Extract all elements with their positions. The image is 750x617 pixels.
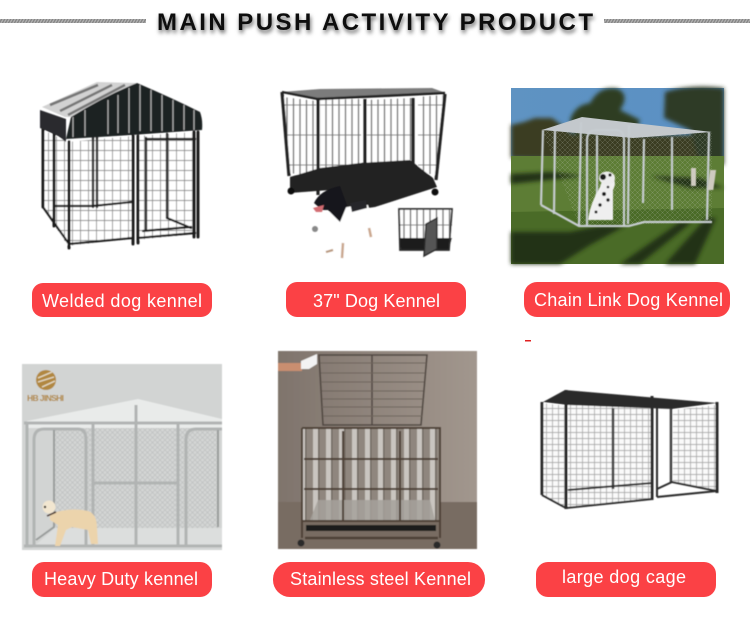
tree shadows bbox=[511, 172, 724, 264]
cage frame bbox=[542, 390, 717, 509]
welded kennel dark roof front bbox=[66, 83, 202, 139]
stainless tray bbox=[306, 525, 436, 531]
label: chain link dog kennel bbox=[524, 282, 730, 317]
label: stainless steel kennel bbox=[273, 562, 485, 597]
foreground grass bbox=[511, 208, 724, 264]
label: 37 inch dog kennel: 37" Dog Kennel bbox=[313, 291, 440, 311]
red speck bbox=[525, 340, 531, 342]
label: large dog cage bbox=[536, 562, 716, 597]
logo: HB JINSHI bbox=[27, 393, 64, 403]
label: large dog cage: large dog cage bbox=[562, 567, 686, 587]
arm and glove bbox=[278, 354, 317, 371]
stainless floor bbox=[278, 502, 477, 549]
cage right mesh bbox=[673, 405, 716, 492]
stainless floor grid bbox=[310, 500, 435, 520]
label: heavy duty kennel bbox=[32, 562, 212, 597]
dalmatian bbox=[588, 172, 615, 220]
small crate bbox=[399, 209, 452, 256]
label: heavy duty kennel: Heavy Duty kennel bbox=[44, 569, 198, 589]
title: MAIN PUSH ACTIVITY PRODUCT bbox=[157, 9, 593, 36]
welded kennel striped roof side bbox=[42, 82, 137, 117]
cage side mesh left bbox=[543, 403, 566, 508]
product: chain link dog kennel photo bbox=[511, 87, 724, 264]
logo bbox=[27, 370, 64, 403]
header rule left bbox=[0, 19, 146, 23]
crate wheels bbox=[288, 188, 438, 196]
label: stainless steel kennel: Stainless steel Kennel bbox=[290, 569, 471, 589]
label: chain link dog kennel: Chain Link Dog Kennel bbox=[534, 290, 723, 310]
crate tray base bbox=[290, 160, 437, 212]
welded kennel roof flap bbox=[40, 110, 66, 142]
open lid bbox=[319, 355, 427, 425]
grass bbox=[511, 156, 724, 216]
cage front mesh bbox=[568, 405, 652, 507]
product: welded dog kennel bbox=[40, 82, 202, 248]
chain mesh bbox=[542, 130, 712, 226]
product: 37 inch dog kennel bbox=[281, 88, 452, 258]
heavy duty roof bbox=[27, 399, 222, 428]
heavy duty floor bbox=[32, 528, 222, 548]
crate frame bbox=[282, 92, 445, 205]
product: heavy duty kennel photo bbox=[22, 364, 222, 550]
dog bbox=[312, 186, 371, 258]
yellow dog bbox=[42, 500, 98, 546]
stainless casters bbox=[298, 540, 440, 548]
cage dark roof bbox=[543, 390, 717, 409]
crate mesh walls bbox=[283, 95, 443, 180]
chain kennel roof bbox=[542, 117, 712, 138]
crate top bbox=[281, 88, 446, 99]
welded kennel mesh walls bbox=[43, 130, 195, 246]
product: large dog cage bbox=[542, 390, 717, 509]
label: welded dog kennel bbox=[32, 283, 212, 317]
trees bbox=[511, 87, 724, 165]
product: stainless steel kennel photo bbox=[278, 351, 477, 549]
heavy duty frame bbox=[24, 405, 222, 547]
stainless frame bbox=[302, 428, 440, 538]
heavy duty back mesh bbox=[55, 428, 218, 530]
label: welded dog kennel: Welded dog kennel bbox=[42, 291, 202, 311]
stainless cage body bbox=[302, 429, 439, 520]
header rule right bbox=[604, 19, 750, 23]
tree trunks distant bbox=[691, 168, 716, 190]
welded kennel frame bbox=[43, 128, 198, 248]
label: 37 inch dog kennel bbox=[286, 282, 466, 317]
chain kennel frame bbox=[541, 122, 712, 226]
